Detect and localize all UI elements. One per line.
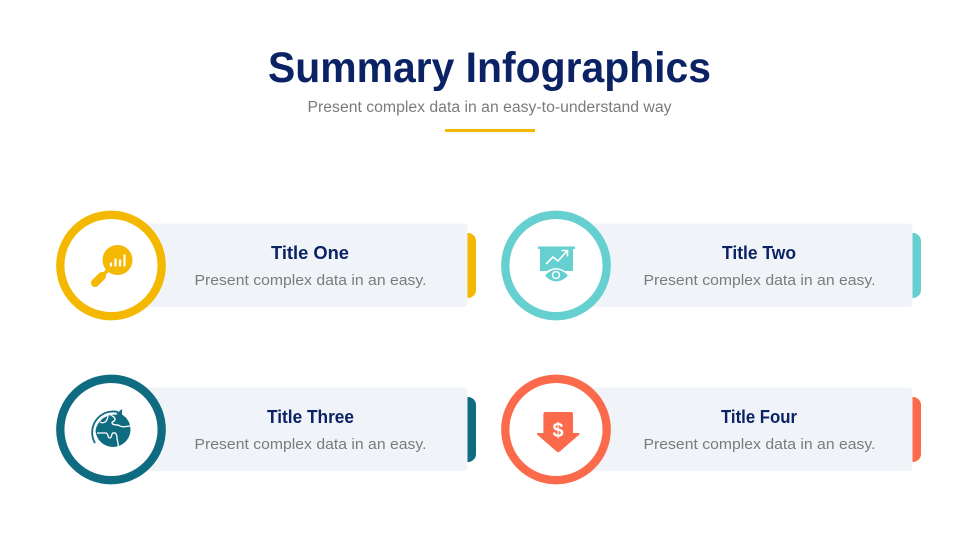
- description: Present complex data in an easy.: [644, 272, 876, 289]
- icon: magnifier with bars: [95, 245, 132, 283]
- panel: title three: [60, 379, 476, 480]
- heading: Title One: [271, 242, 349, 263]
- icon: dollar down arrow: [537, 412, 579, 452]
- description: Present complex data in an easy.: [194, 272, 426, 289]
- ring: [505, 215, 607, 316]
- heading: Title Four: [721, 406, 797, 427]
- icon: dollar down arrow: $: [552, 420, 564, 442]
- card: [580, 388, 912, 471]
- ring: [60, 379, 162, 480]
- panel: title two: [505, 215, 921, 316]
- heading: Title Three: [267, 406, 354, 427]
- side tab: [912, 397, 921, 462]
- description: Present complex data in an easy.: [644, 436, 876, 453]
- title: Summary Infographics: [268, 44, 711, 92]
- card: [130, 224, 468, 307]
- icon: chart with eye: [538, 246, 575, 283]
- title underline: [445, 129, 535, 132]
- ring: [60, 215, 162, 316]
- card: [130, 388, 468, 471]
- card: [580, 224, 912, 307]
- panel: title four: [505, 379, 921, 480]
- side tab: [467, 397, 476, 462]
- heading: Title Two: [722, 242, 796, 263]
- side tab: [467, 233, 476, 298]
- side tab: [912, 233, 921, 298]
- subtitle: Present complex data in an easy-to-understand way: [308, 99, 672, 116]
- description: Present complex data in an easy.: [194, 436, 426, 453]
- icon: globe with arrow: [92, 409, 131, 447]
- ring: [505, 379, 607, 480]
- panel: title one: [60, 215, 476, 316]
